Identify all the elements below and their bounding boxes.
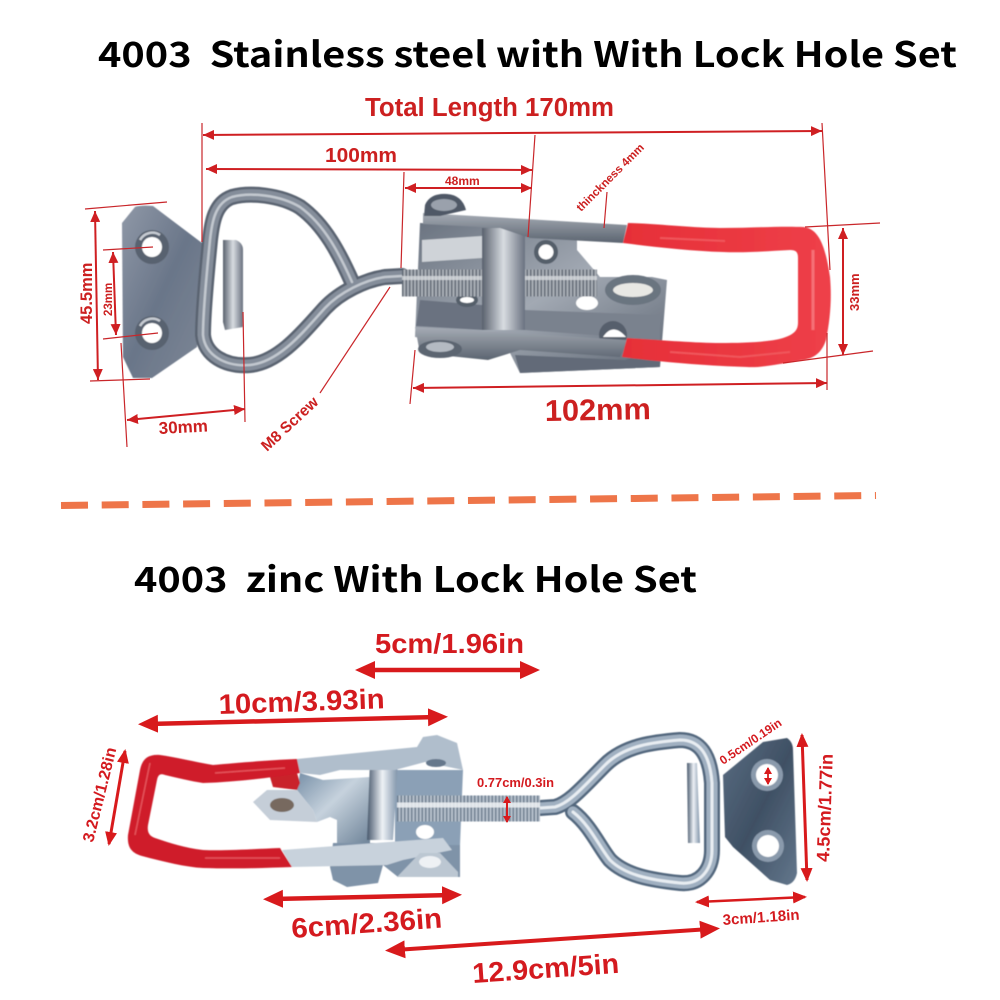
wire loop bbox=[203, 195, 402, 365]
latch body bbox=[415, 223, 667, 373]
top lever and rivet bbox=[297, 735, 463, 775]
illustration: zinc latch bbox=[128, 735, 797, 887]
dimension: 23mm bbox=[103, 247, 158, 339]
leader line bbox=[320, 287, 390, 393]
dimension: 30mm bbox=[121, 312, 245, 447]
arrow bbox=[148, 717, 438, 724]
arrow bbox=[206, 169, 532, 170]
label: 5cm/1.96in bbox=[375, 628, 524, 659]
label: 0.5cm/0.19in bbox=[717, 716, 784, 767]
arrow bbox=[273, 895, 452, 899]
red handle bbox=[128, 755, 300, 868]
bottom lever and rivet bbox=[415, 327, 627, 360]
title: zinc set: 4003 zinc With Lock Hole Set bbox=[134, 552, 697, 603]
dimension: 48mm bbox=[405, 174, 532, 188]
label: 102mm bbox=[545, 393, 651, 428]
label: 3.2cm/1.28in bbox=[80, 746, 120, 844]
latch body bbox=[253, 770, 463, 887]
title: stainless steel set: 4003 Stainless steel with With Lock Hole Set bbox=[98, 27, 957, 78]
dimension: 45.5mm bbox=[78, 202, 167, 381]
label: thinckness 4mm bbox=[575, 142, 647, 214]
label: 30mm bbox=[158, 416, 208, 438]
dimension: total length 170mm bbox=[202, 94, 830, 270]
arrow bbox=[95, 211, 98, 380]
label: Total Length 170mm bbox=[365, 94, 614, 122]
arrow bbox=[506, 797, 508, 822]
callout: thickness bbox=[575, 142, 647, 228]
arrow bbox=[365, 668, 530, 672]
arrow bbox=[113, 252, 116, 335]
dimension: 12.9cm/5in bbox=[395, 929, 710, 989]
threaded screw bbox=[397, 805, 540, 808]
label: 12.9cm/5in bbox=[471, 948, 620, 989]
label: 100mm bbox=[325, 145, 397, 167]
inner bar bbox=[223, 240, 243, 330]
dimension: 0.5cm/0.19in bbox=[717, 716, 784, 784]
arrow bbox=[127, 409, 245, 420]
label: M8 Screw bbox=[258, 393, 323, 455]
label: 3cm/1.18in bbox=[722, 907, 800, 929]
illustration: stainless steel latch bbox=[122, 194, 831, 378]
wire loop bbox=[540, 740, 712, 883]
dimension: 0.77cm/0.3in bbox=[477, 776, 554, 822]
inner bar bbox=[687, 763, 700, 843]
arrow bbox=[203, 131, 822, 135]
dimension: 10cm/3.93in bbox=[148, 683, 438, 724]
arrow bbox=[405, 187, 532, 189]
label: 45.5mm bbox=[78, 263, 96, 324]
label: 4.5cm/1.77in bbox=[813, 754, 837, 862]
dimension: 4.5cm/1.77in bbox=[802, 735, 837, 880]
threaded screw bbox=[402, 278, 597, 283]
barrel nut bbox=[367, 760, 398, 840]
arrow bbox=[767, 768, 769, 784]
arrow bbox=[802, 735, 807, 880]
label: 48mm bbox=[445, 174, 480, 188]
barrel nut bbox=[482, 228, 525, 330]
arrow bbox=[842, 228, 844, 355]
bottom lever and rivet bbox=[282, 838, 458, 877]
dimension: 6cm/2.36in bbox=[273, 895, 452, 944]
label: 0.77cm/0.3in bbox=[477, 776, 554, 790]
dimension: 102mm bbox=[410, 333, 827, 428]
mounting plate bbox=[122, 206, 202, 378]
dimension: 3.2cm/1.28in bbox=[80, 746, 125, 844]
dimension: 3cm/1.18in bbox=[697, 897, 805, 929]
dimension: 100mm bbox=[206, 145, 532, 268]
arrow bbox=[395, 929, 710, 950]
mounting plate bbox=[723, 738, 797, 885]
label: 33mm bbox=[847, 273, 862, 311]
label: 10cm/3.93in bbox=[218, 683, 385, 720]
leader line bbox=[604, 192, 607, 228]
section divider: orange dashed line bbox=[61, 496, 876, 506]
arrow bbox=[109, 751, 125, 844]
callout: M8 screw bbox=[258, 287, 390, 455]
label: 6cm/2.36in bbox=[290, 903, 443, 944]
arrow bbox=[697, 897, 805, 902]
dimension: 33mm bbox=[783, 223, 880, 363]
label: 23mm bbox=[103, 283, 115, 316]
arrow bbox=[413, 383, 827, 388]
top lever and rivet bbox=[423, 194, 627, 243]
red handle bbox=[622, 223, 831, 367]
